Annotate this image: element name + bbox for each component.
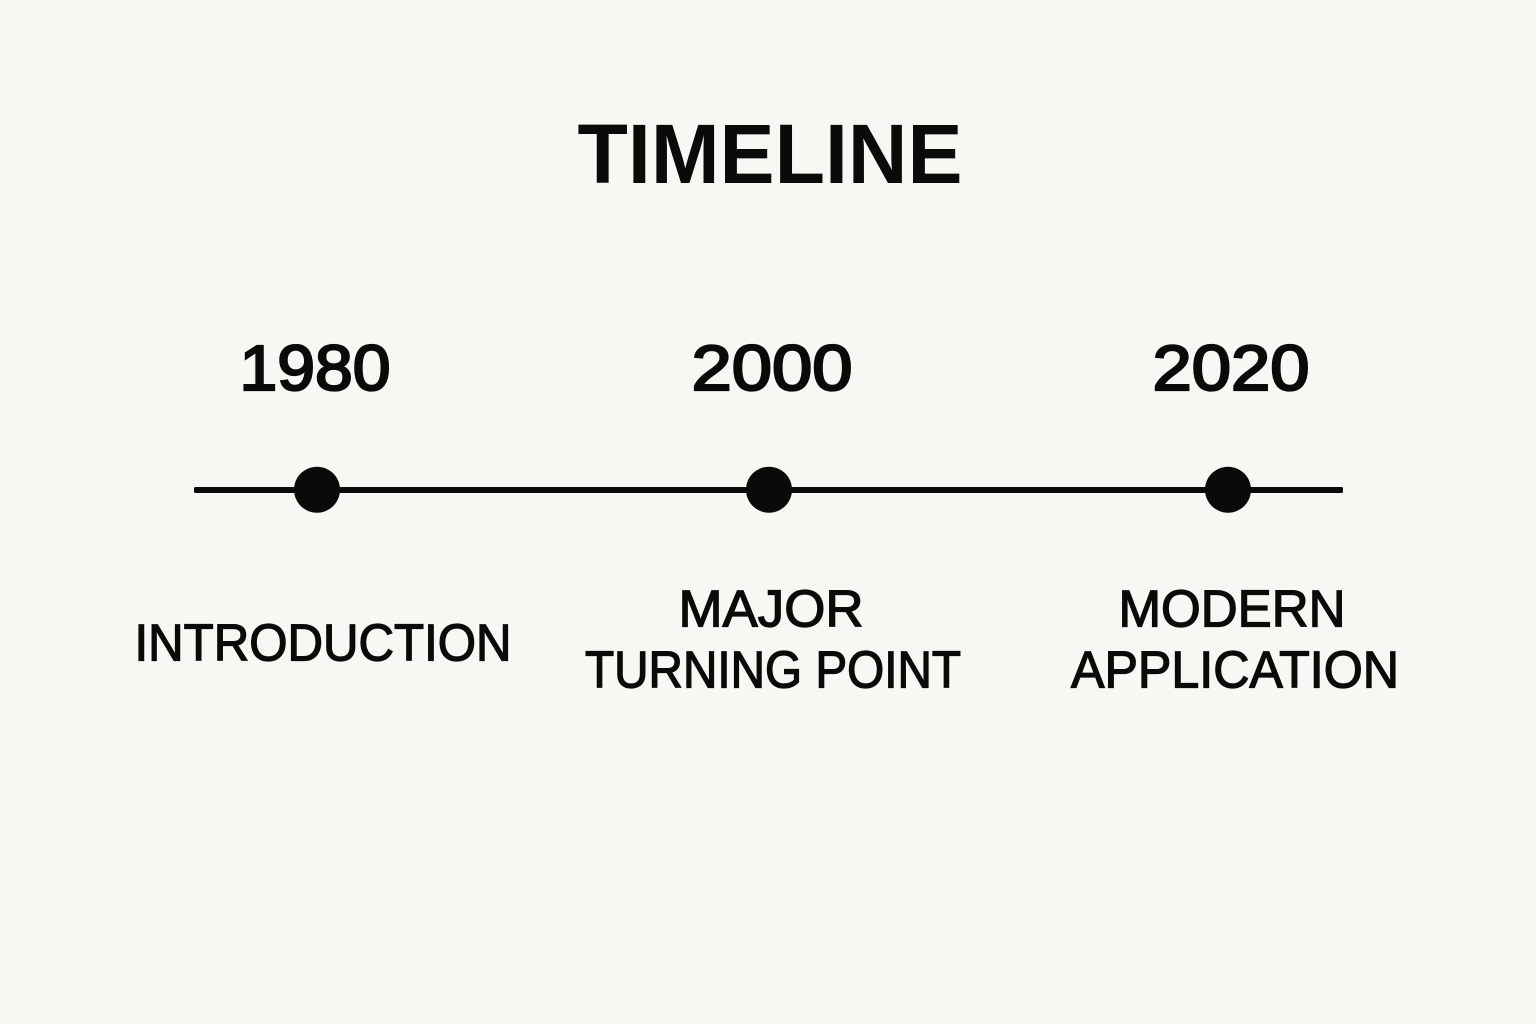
label: modern application: MODERN — [1118, 580, 1346, 638]
label: introduction: INTRODUCTION — [134, 614, 512, 672]
timeline axis line — [194, 487, 1343, 493]
label: modern application: APPLICATION — [1071, 642, 1399, 700]
year: 1980: 1980 — [240, 332, 390, 404]
marker: 2020 — [1205, 467, 1251, 513]
label: major turning point — [585, 580, 961, 700]
title: TIMELINE — [578, 107, 962, 201]
label: major turning point: MAJOR — [678, 580, 864, 638]
label: major turning point: TURNING POINT — [585, 642, 961, 700]
year: 2000: 2000 — [692, 332, 852, 404]
year: 2020: 2020 — [1152, 332, 1310, 404]
timeline chart — [134, 332, 1399, 700]
label: modern application — [1071, 580, 1399, 700]
marker: 1980 — [294, 467, 340, 513]
marker: 2000 — [746, 467, 792, 513]
